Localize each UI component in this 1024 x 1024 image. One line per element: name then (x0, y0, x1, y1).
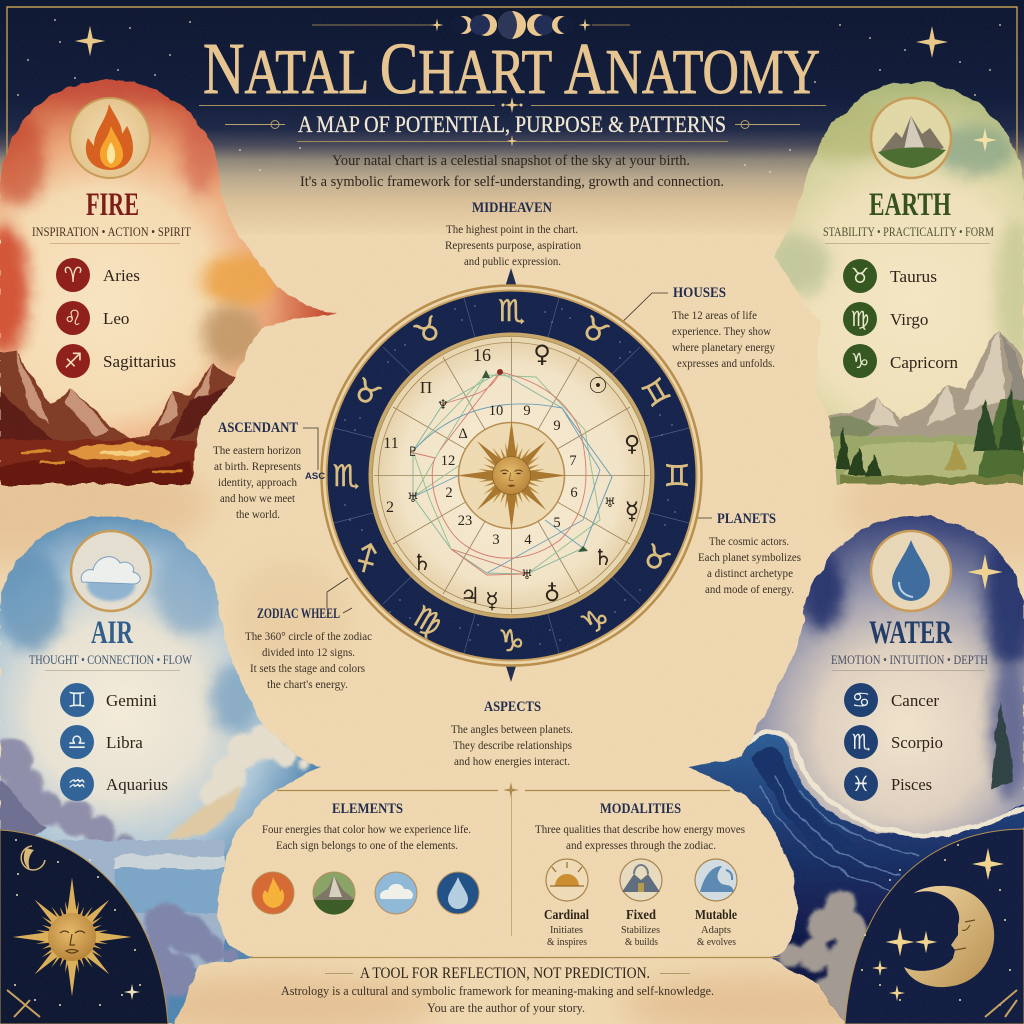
house numbers and planet symbols: ♅︎ (604, 496, 616, 511)
ascendant description (213, 443, 301, 521)
fire sign list: Aries (103, 266, 140, 285)
subtitle: A MAP OF POTENTIAL, PURPOSE & PATTERNS (298, 112, 726, 138)
elements description: Each sign belongs to one of the elements. (276, 838, 458, 852)
houses description: where planetary energy (672, 340, 775, 354)
modality: mutable: Adapts (701, 924, 731, 936)
water sign list: Cancer (891, 691, 939, 710)
panel dividers (250, 782, 780, 958)
houses description (672, 308, 775, 370)
planets description (698, 534, 801, 596)
corner: sun illustration (0, 830, 168, 1024)
zodiac glyphs: ♉︎ (346, 371, 387, 415)
earth sign list: Taurus (890, 267, 937, 286)
house numbers and planet symbols: ♅︎ (407, 491, 419, 506)
natal chart wheel (322, 268, 702, 682)
houses heading: HOUSES (673, 285, 726, 301)
modality: mutable (695, 859, 737, 948)
air keywords: THOUGHT • CONNECTION • FLOW (29, 653, 192, 667)
water star (967, 554, 1003, 590)
house numbers and planet symbols: ☿︎ (485, 589, 499, 614)
midheaven description: The highest point in the chart. (446, 222, 578, 236)
ascendant description: the world. (236, 507, 280, 521)
air watercolour background and clouds (0, 500, 340, 1024)
zodiac wheel description: It sets the stage and colors (250, 661, 365, 675)
aspects callout (451, 699, 573, 768)
earth sign list: Capricorn (890, 353, 958, 372)
house numbers and planet symbols (383, 340, 640, 614)
planets description: a distinct archetype (707, 566, 793, 580)
earth watercolour background (774, 81, 1024, 486)
modality: cardinal: & inspires (547, 936, 587, 948)
element icons (252, 872, 479, 915)
earth star (973, 128, 997, 152)
title divider (199, 97, 826, 113)
fire sign list: ♌︎ (64, 306, 82, 330)
air sign list: Gemini (106, 691, 157, 710)
midheaven description: Represents purpose, aspiration (445, 238, 581, 252)
elements heading: ELEMENTS (332, 801, 403, 817)
inner rings (368, 332, 654, 618)
ascendant callout (213, 420, 318, 521)
house numbers and planet symbols: ☿︎ (625, 497, 639, 525)
houses description: The 12 areas of life (672, 308, 757, 322)
modality: fixed: Stabilizes (621, 924, 660, 936)
zodiac glyphs: ♊︎ (636, 371, 677, 415)
aspects description: and how energies interact. (454, 754, 570, 768)
ascendant description: and how we meet (220, 491, 296, 505)
modalities description: Three qualities that describe how energy moves (535, 822, 745, 836)
modality: fixed: Fixed (626, 908, 656, 923)
modalities description (535, 822, 745, 852)
water watercolour background, wave and clouds (680, 500, 1024, 1024)
earth divider (825, 242, 990, 244)
air sign list: ♒︎ (68, 772, 86, 796)
zodiac wheel description (245, 629, 372, 691)
earth sign list: ♑︎ (851, 349, 869, 373)
air divider (45, 670, 180, 672)
ascendant leader (303, 428, 318, 470)
modality: cardinal (544, 859, 589, 948)
midheaven description: and public expression. (464, 254, 561, 268)
zodiac glyphs: ♍︎ (407, 599, 448, 643)
modality: fixed: & builds (625, 936, 658, 948)
moon phases ornament (312, 11, 630, 39)
zodiac glyphs: ♏︎ (333, 459, 359, 494)
air heading: AIR (91, 615, 134, 651)
zodiac wheel description: divided into 12 signs. (262, 645, 355, 659)
zodiac glyphs: ♉︎ (574, 309, 615, 353)
earth medallion (871, 98, 951, 178)
house numbers and planet symbols: ♀︎ (624, 432, 640, 457)
zodiac glyphs: ♑︎ (575, 599, 616, 643)
house numbers and planet symbols: ♄︎ (412, 551, 432, 576)
footer text: You are the author of your story. (427, 1000, 585, 1015)
panel: water (680, 500, 1024, 1024)
axis markers (506, 268, 516, 682)
house numbers and planet symbols: ♄︎ (593, 546, 613, 571)
subtitle ornaments (225, 120, 800, 147)
panel: earth (774, 81, 1024, 486)
modality: fixed (620, 859, 662, 948)
zodiac glyphs: ♑︎ (498, 624, 525, 659)
zodiac wheel description: the chart's energy. (267, 677, 348, 691)
fire keywords: INSPIRATION • ACTION • SPIRIT (32, 225, 191, 239)
house numbers and planet symbols: 12 (441, 453, 455, 469)
zodiac glyphs (333, 294, 690, 659)
house numbers and planet symbols: 16 (473, 345, 491, 365)
intro text: It's a symbolic framework for self-understanding, growth and connection. (300, 174, 724, 190)
zodiac wheel leader (327, 578, 352, 613)
air sign list: Libra (106, 733, 143, 752)
planets heading: PLANETS (717, 511, 776, 527)
air sign list: ♊︎ (68, 688, 86, 712)
ring dividers and constellations (334, 298, 689, 653)
modality: mutable: & evolves (697, 936, 736, 948)
ASC marker: ASC (305, 471, 325, 482)
chart face (378, 342, 644, 608)
houses description: expresses and unfolds. (677, 356, 775, 370)
house numbers and planet symbols: ♅︎ (521, 568, 533, 583)
air medallion (71, 531, 151, 611)
houses leader arrow (606, 293, 668, 338)
water medallion (871, 531, 951, 611)
earth sign list: Virgo (890, 310, 928, 329)
water sign list: Pisces (891, 775, 932, 794)
water sign list: ♓︎ (852, 772, 870, 796)
footer ornaments (325, 972, 690, 974)
modalities description: and expresses through the zodiac. (566, 838, 716, 852)
ascendant description: identity, approach (218, 475, 297, 489)
title: NATAL CHART ANATOMY (203, 28, 820, 109)
water heading: WATER (869, 615, 953, 651)
house numbers and planet symbols: 2 (445, 485, 453, 501)
aspects description: The angles between planets. (451, 722, 573, 736)
zodiac glyphs: ♉︎ (408, 309, 449, 353)
fire sign list: ♈︎ (64, 263, 82, 287)
water sign list: ♋︎ (852, 688, 870, 712)
water sign list (844, 683, 943, 801)
modalities heading: MODALITIES (600, 801, 681, 817)
house numbers and planet symbols: ♆︎ (437, 398, 449, 413)
central sun (456, 420, 566, 530)
planets description: The cosmic actors. (709, 534, 789, 548)
planets leader (690, 517, 712, 519)
zodiac glyphs: ♐︎ (347, 537, 388, 581)
outer rings (322, 286, 702, 666)
water sign list: Scorpio (891, 733, 943, 752)
house numbers and planet symbols: ☉︎ (588, 374, 608, 399)
intro text (300, 153, 724, 190)
aspects description (451, 722, 573, 768)
footer text (281, 983, 714, 1015)
house numbers and planet symbols: 9 (523, 403, 531, 419)
aspects heading: ASPECTS (484, 699, 541, 715)
fire medallion (70, 98, 150, 178)
air sign list: Aquarius (106, 775, 168, 794)
earth sign list (843, 259, 958, 378)
zodiac glyphs: ♉︎ (635, 537, 676, 581)
air sign list: ♎︎ (68, 730, 86, 754)
water keywords: EMOTION • INTUITION • DEPTH (831, 653, 988, 667)
zodiac glyphs: ♊︎ (664, 459, 690, 494)
fire watercolour background (0, 79, 337, 486)
planets callout (690, 511, 801, 596)
house spokes (374, 338, 649, 613)
midheaven description (445, 222, 581, 268)
house numbers and planet symbols: 3 (492, 532, 500, 548)
footer text: Astrology is a cultural and symbolic framework for meaning-making and self-knowledge. (281, 983, 714, 998)
fire heading: FIRE (86, 187, 139, 223)
house numbers and planet symbols: 11 (383, 435, 399, 452)
night sky header (0, 0, 1024, 235)
ascendant description: The eastern horizon (213, 443, 301, 457)
houses callout (606, 285, 775, 370)
elements description: Four energies that color how we experience life. (262, 822, 471, 836)
house numbers and planet symbols: ♇︎ (407, 445, 419, 460)
houses description: experience. They show (672, 324, 771, 338)
aspects description: They describe relationships (453, 738, 572, 752)
air sign list (60, 683, 168, 801)
house numbers and planet symbols: Π (420, 378, 432, 397)
water sign list: ♏︎ (852, 730, 871, 754)
aspect nodes (482, 369, 588, 552)
house numbers and planet symbols: 2 (386, 499, 394, 516)
house numbers and planet symbols: ♁︎ (544, 582, 560, 607)
house numbers and planet symbols: 23 (458, 513, 472, 529)
house numbers and planet symbols: 5 (553, 515, 561, 531)
panel: elements and modalities (250, 782, 780, 958)
earth heading: EARTH (869, 187, 951, 223)
modality: cardinal: Cardinal (544, 908, 589, 923)
fire sign list: ♐︎ (64, 349, 82, 373)
earth sign list: ♍︎ (851, 307, 869, 331)
zodiac wheel callout (245, 578, 372, 691)
elements description (262, 822, 471, 852)
house numbers and planet symbols: Δ (458, 426, 468, 442)
zodiac glyphs: ♏︎ (498, 294, 525, 329)
zodiac ring (328, 292, 696, 660)
house numbers and planet symbols: 9 (553, 418, 561, 434)
house numbers and planet symbols: ♃︎ (460, 584, 480, 609)
footer heading: A TOOL FOR REFLECTION, NOT PREDICTION. (360, 965, 650, 982)
panel: fire (0, 79, 337, 486)
elements section (252, 801, 479, 915)
zodiac wheel heading: ZODIAC WHEEL (257, 606, 340, 622)
house numbers and planet symbols: 6 (570, 485, 578, 501)
fire sign list: Leo (103, 309, 129, 328)
aspect lines (410, 372, 612, 575)
fire sign list: Sagittarius (103, 352, 176, 371)
fire divider (50, 242, 180, 244)
panel: air (0, 500, 340, 1024)
earth sign list: ♉︎ (851, 264, 869, 288)
midheaven heading: MIDHEAVEN (472, 200, 552, 216)
modalities section (535, 801, 745, 948)
intro text: Your natal chart is a celestial snapshot of the sky at your birth. (332, 153, 690, 169)
modality: mutable: Mutable (695, 908, 737, 923)
fire sign list (56, 258, 176, 378)
planets description: and mode of energy. (705, 582, 794, 596)
house numbers and planet symbols: 7 (569, 453, 577, 469)
ascendant description: at birth. Represents (214, 459, 301, 473)
ascendant heading: ASCENDANT (218, 420, 298, 436)
corner: crescent moon illustration (845, 829, 1024, 1024)
house numbers and planet symbols: 4 (524, 532, 532, 548)
midheaven callout (445, 200, 581, 268)
water divider (832, 670, 985, 672)
house numbers and planet symbols: ♀︎ (533, 340, 551, 368)
planets description: Each planet symbolizes (698, 550, 801, 564)
modality: cardinal: Initiates (550, 924, 583, 936)
footer (281, 965, 714, 1015)
house numbers and planet symbols: 10 (489, 403, 503, 419)
zodiac wheel description: The 360° circle of the zodiac (245, 629, 372, 643)
centre disc (458, 422, 564, 528)
